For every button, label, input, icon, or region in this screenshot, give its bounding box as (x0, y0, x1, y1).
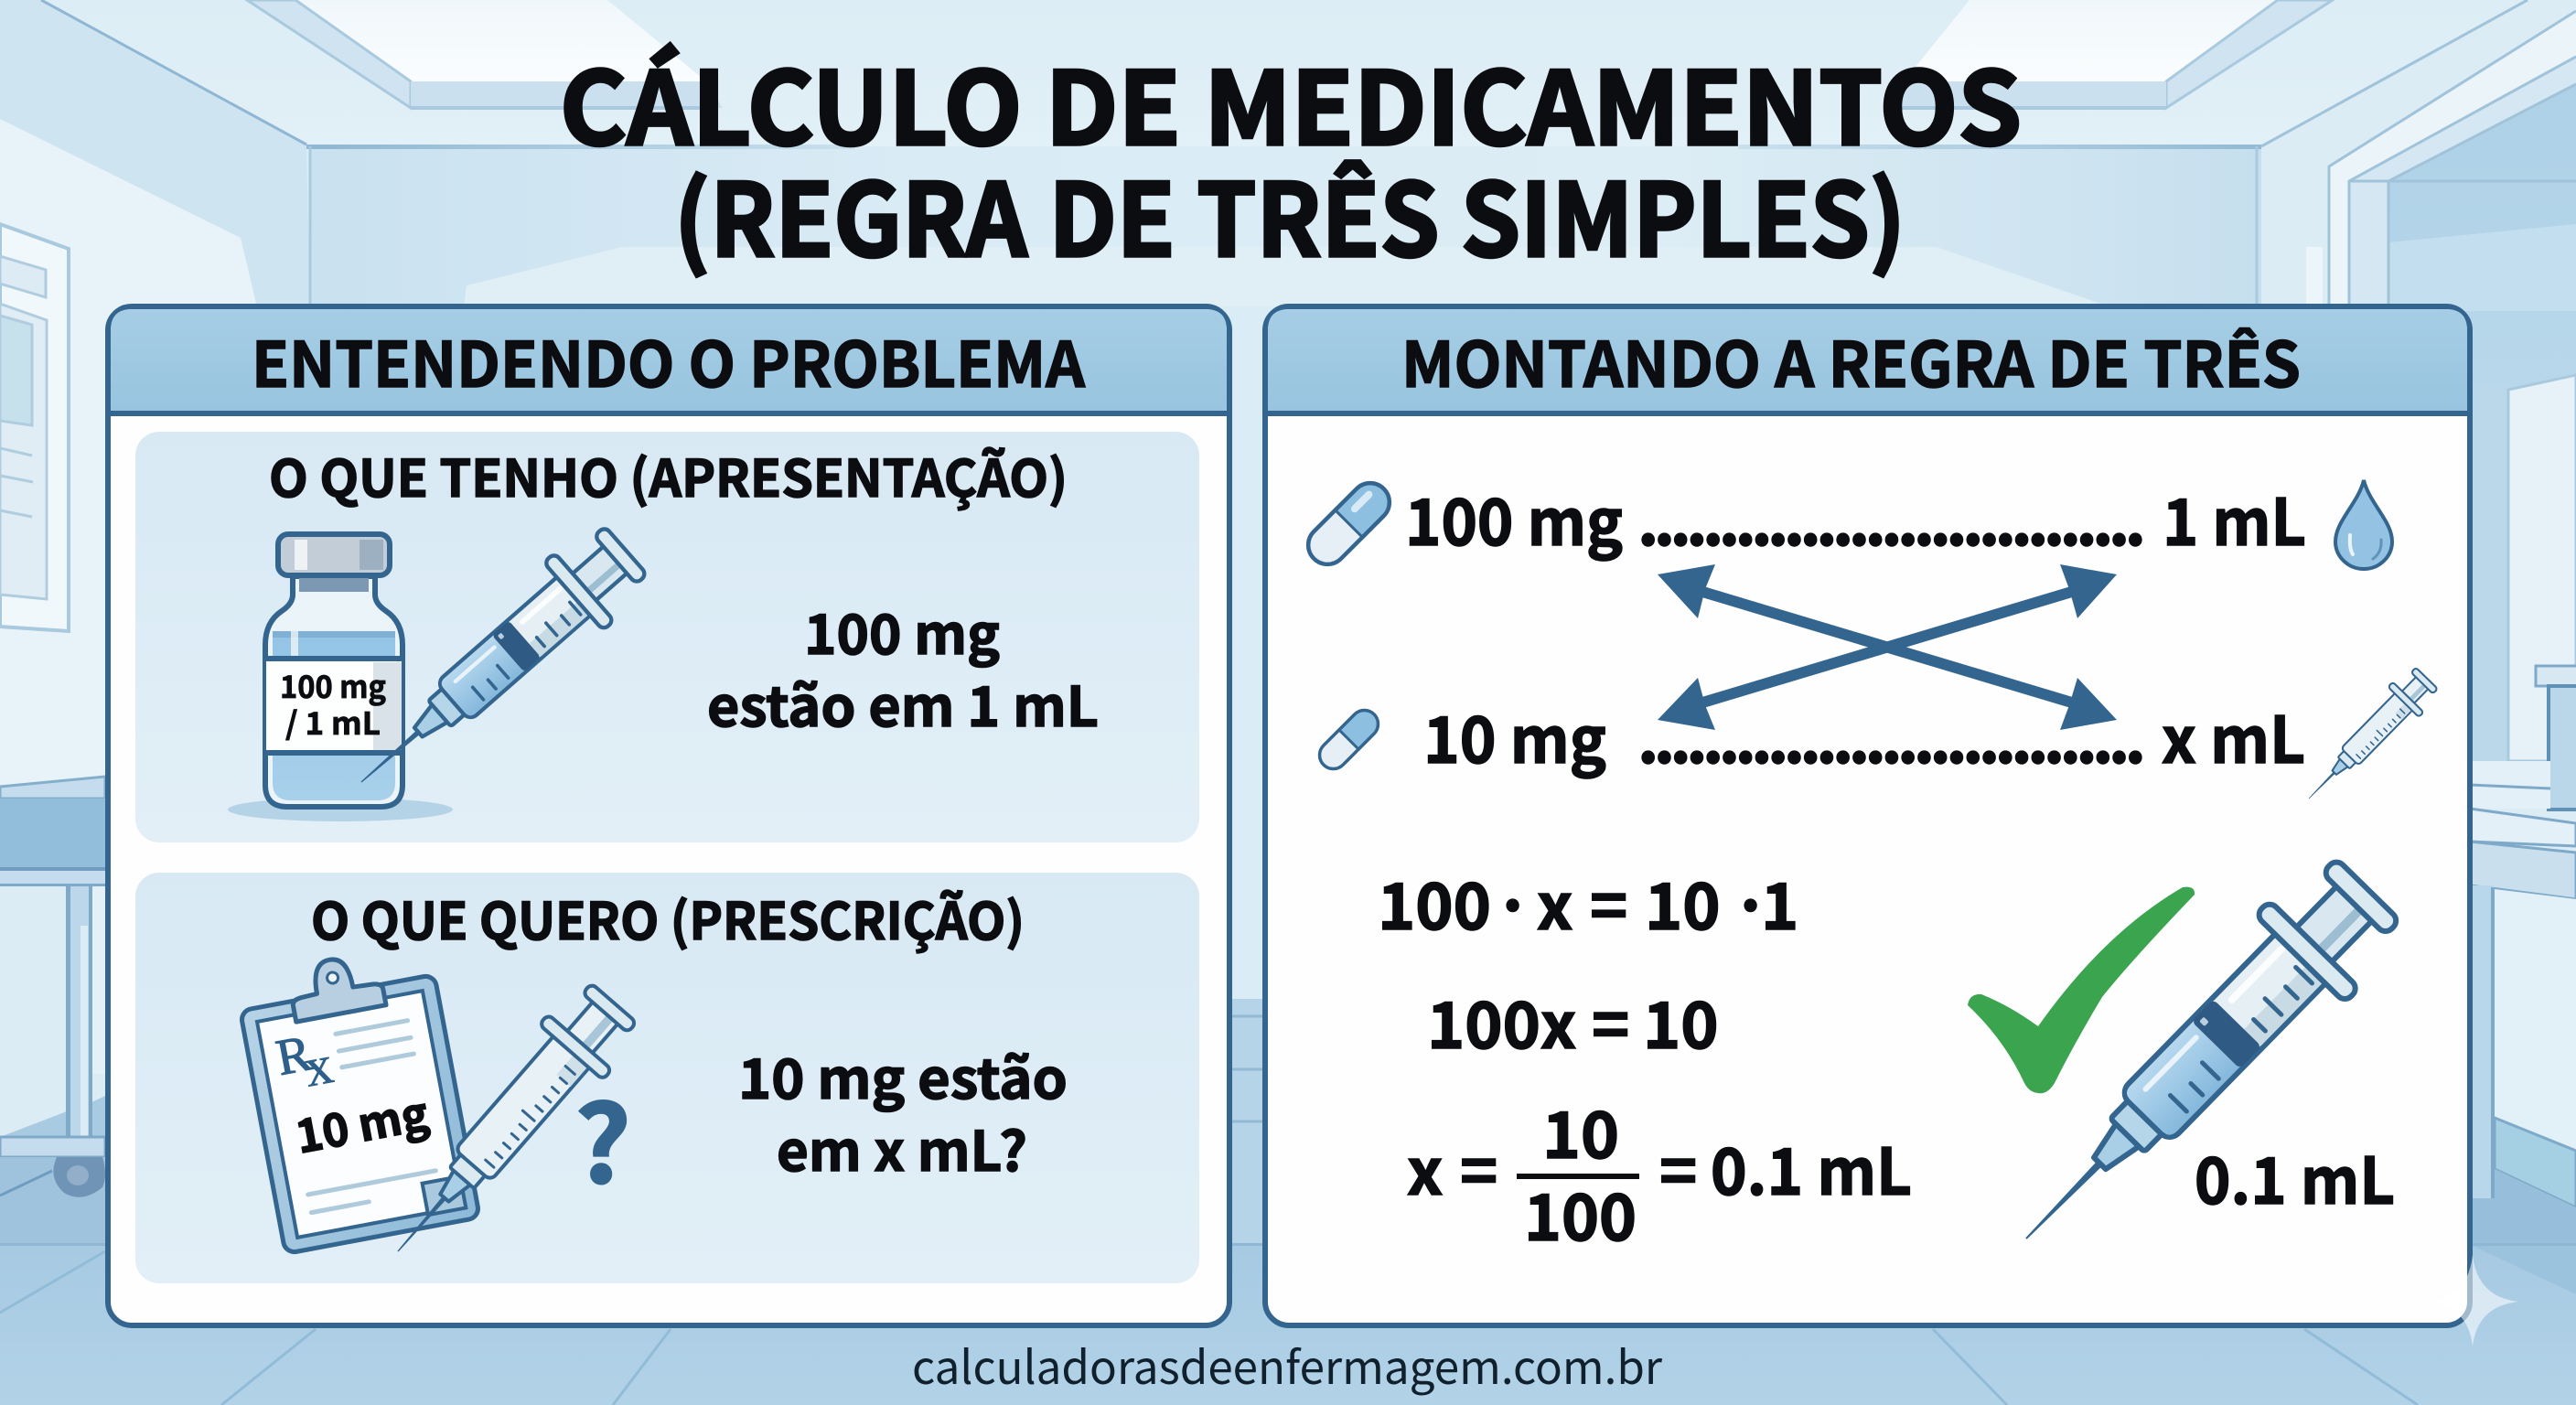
equations: 100 (1524, 1167, 1637, 1260)
panel header: montando a regra de três (1265, 309, 2470, 416)
icon: vial with syringe: / 1 mL (285, 699, 381, 744)
equations: = (1659, 1121, 1697, 1214)
equations: = (1460, 1121, 1497, 1214)
equations: 100 (1378, 856, 1491, 949)
text: 10 mg estão em x mL?: 10 mg estão (738, 1035, 1068, 1115)
panel: entendendo o problema (108, 306, 1229, 1325)
equations (1378, 856, 1912, 1260)
equations: = (1590, 856, 1627, 949)
text: 10 mg estão em x mL? (738, 1035, 1068, 1187)
panel header: entendendo o problema (108, 309, 1229, 416)
icon: clipboard prescription (234, 941, 479, 1254)
crossed arrows (1658, 564, 2117, 730)
text: x mL: x mL (2162, 690, 2305, 782)
icon: vial with syringe: 100 mg (280, 662, 386, 707)
icon: water drop (2335, 480, 2392, 569)
text: result 0.1 mL: 0.1 mL (2195, 1131, 2395, 1223)
icon: large capsule (1300, 475, 1398, 573)
title (560, 27, 2022, 285)
icon: syringe filled (332, 517, 656, 816)
card: o que quero (135, 873, 1199, 1283)
equations: x (1537, 856, 1572, 949)
equations: = (1592, 975, 1629, 1067)
heading: o que tenho: O QUE TENHO (APRESENTAÇÃO) (269, 438, 1068, 512)
panel: montando a regra de três (1265, 306, 2470, 1325)
text: 100 mg estão em 1 mL: estão em 1 mL (707, 663, 1099, 743)
text: 100 mg estão em 1 mL: 100 mg (804, 591, 1000, 670)
icon: green check mark (1968, 887, 2195, 1093)
title: (REGRA DE TRÊS SIMPLES) (674, 139, 1905, 285)
text: 10 mg: 10 mg (1423, 690, 1606, 782)
text: 100 mg estão em 1 mL (707, 591, 1099, 743)
panel header: montando a regra de três: MONTANDO A REGRA DE TRÊS (1401, 315, 2301, 405)
dotted leader: first row: ............................... (1637, 468, 2146, 564)
card: o que tenho (135, 432, 1199, 842)
text: 1 mL: 1 mL (2163, 472, 2306, 564)
icon: clipboard prescription: R (272, 1024, 317, 1087)
icon: question mark: ? (574, 1060, 631, 1214)
panel header: entendendo o problema: ENTENDENDO O PROBLEMA (252, 315, 1085, 405)
icon: clipboard prescription: x (299, 1034, 338, 1099)
text: 10 mg estão em x mL?: em x mL? (777, 1108, 1027, 1187)
equations: 0.1 mL (1711, 1121, 1912, 1214)
text: 100 mg: 100 mg (1405, 472, 1623, 564)
equations: · (1494, 856, 1531, 949)
equations: x (1407, 1121, 1443, 1214)
equations: · (1732, 856, 1769, 949)
icon: small syringe (2293, 663, 2442, 814)
icon: vial with syringe (228, 517, 656, 821)
footer url: calculadorasdeenfermagem.com.br (912, 1332, 1663, 1398)
equations: 10 (1645, 856, 1721, 949)
dotted leader: second row: ............................... (1637, 686, 2146, 782)
equations: 100x (1427, 975, 1576, 1067)
equations: 10 (1643, 975, 1719, 1067)
icon: large syringe (1981, 846, 2413, 1282)
equations: 1 (1761, 856, 1798, 949)
equations: 10 (1542, 1085, 1619, 1177)
icon: small capsule (1314, 704, 1384, 775)
title: CÁLCULO DE MEDICAMENTOS (560, 27, 2022, 174)
heading: o que quero: O QUE QUERO (PRESCRIÇÃO) (311, 881, 1025, 955)
icon: clipboard prescription: 10 mg (290, 1078, 434, 1167)
watermark sparkle (2429, 1255, 2518, 1346)
icon: empty syringe (366, 975, 646, 1279)
